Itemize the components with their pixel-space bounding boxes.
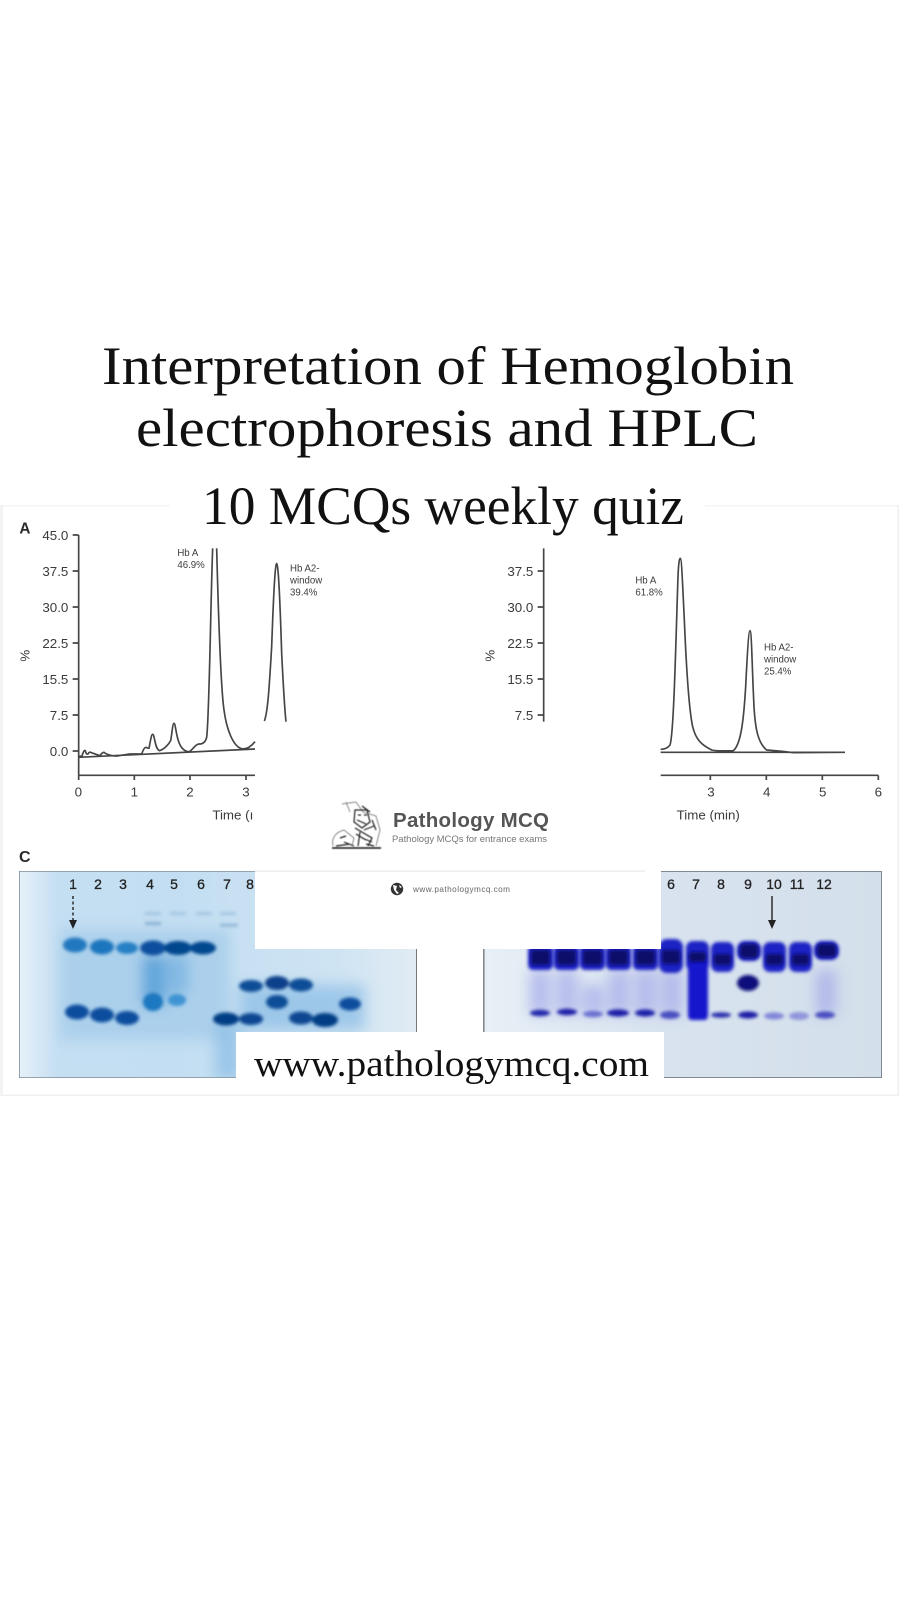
x axis: Time (min) [677, 807, 740, 822]
x axis: 1 [131, 785, 138, 800]
logo name: Pathology MCQ [393, 809, 549, 832]
label: Hb A2 window: window [763, 654, 796, 665]
gel border [19, 871, 255, 1078]
y axis [482, 548, 544, 723]
label: Hb A2 window: 39.4% [290, 587, 318, 598]
smears [530, 970, 836, 1015]
y axis: 7.5 [50, 708, 68, 723]
label: Hb A2 window: Hb A2- [764, 642, 794, 653]
band cores: darker centres [531, 944, 836, 965]
lane numbers: left gel: 5 [170, 876, 178, 892]
title: 10 MCQs weekly quiz [202, 476, 684, 536]
panel label C: C [19, 849, 31, 866]
lane numbers: left gel [69, 876, 254, 892]
x axis [661, 775, 882, 822]
lane numbers: left gel: 1 [69, 876, 77, 892]
icon: pathologist sketch [332, 802, 381, 848]
y axis: 15.5 [42, 672, 68, 687]
lane numbers: right gel: 8 [717, 876, 725, 892]
x axis: Time (ı [212, 807, 253, 822]
x axis: 6 [875, 785, 882, 800]
y axis: 30.0 [507, 600, 533, 615]
label: Hb A2 window: Hb A2- [290, 563, 320, 574]
x axis: 4 [763, 785, 771, 800]
faint upper bands [145, 912, 238, 926]
panel: figure frame [0, 505, 899, 1096]
y axis: 22.5 [507, 636, 533, 651]
x axis [75, 775, 255, 822]
lane numbers: left gel: 2 [94, 876, 102, 892]
y axis: % [17, 650, 32, 662]
x axis: 3 [707, 785, 715, 800]
icon: globe [391, 883, 403, 895]
arrow: dashed lane marker [69, 896, 77, 929]
lane numbers: left gel: 6 [197, 876, 205, 892]
website banner: www.pathologymcq.com [254, 1044, 649, 1085]
website small text: www.pathologymcq.com [412, 885, 510, 894]
lane numbers: left gel: 8 [246, 876, 254, 892]
logo: Pathology MCQ [332, 802, 549, 848]
y axis: 15.5 [507, 672, 533, 687]
y axis: 45.0 [42, 528, 68, 543]
x axis: 3 [242, 785, 250, 800]
panel: right electrophoresis gel [483, 871, 883, 1078]
y axis: 37.5 [507, 564, 533, 579]
arrow: lane 10 marker [768, 896, 776, 929]
lane numbers: left gel: 7 [223, 876, 231, 892]
label: Hb A: 46.9% [177, 560, 205, 571]
y axis: 0.0 [50, 744, 68, 759]
label: Hb A: Hb A [177, 548, 198, 559]
y axis: % [482, 650, 497, 662]
lane numbers: right gel: 7 [692, 876, 700, 892]
logo tagline: Pathology MCQs for entrance exams [392, 834, 547, 845]
lane numbers: right gel: 9 [744, 876, 752, 892]
label: Hb A: 61.8% [635, 588, 663, 599]
bands: lower row [530, 1009, 835, 1020]
x axis: 2 [186, 785, 194, 800]
title: electrophoresis and HPLC [136, 398, 758, 458]
label: Hb A: Hb A [635, 576, 656, 587]
y axis: 7.5 [515, 708, 533, 723]
panel: left electrophoresis gel [19, 871, 419, 1080]
lane numbers: right gel: 12 [816, 876, 832, 892]
chart: panel B chromatogram [482, 548, 882, 822]
label: Hb A2 window: 25.4% [764, 666, 792, 677]
lane numbers: right gel: 6 [667, 876, 675, 892]
bands: upper row [63, 938, 313, 992]
label: Hb A2 window: window [289, 575, 322, 586]
lane numbers: left gel: 3 [119, 876, 127, 892]
lane numbers: right gel: 11 [790, 876, 804, 892]
title [102, 336, 794, 536]
gel border [661, 871, 882, 1078]
divider line [255, 870, 645, 872]
x axis: 0 [75, 785, 82, 800]
y axis: 30.0 [42, 600, 68, 615]
trace [78, 548, 255, 757]
website row with globe [391, 883, 510, 895]
lane numbers: right gel [667, 876, 832, 892]
bands: upper row [528, 939, 839, 1020]
y axis: 37.5 [42, 564, 68, 579]
bands: lower row [65, 993, 361, 1027]
peak: Hb A2 window [264, 563, 286, 722]
lane numbers: right gel: 10 [766, 876, 782, 892]
x axis: 5 [819, 785, 826, 800]
y axis: 22.5 [42, 636, 68, 651]
lane numbers: left gel: 4 [146, 876, 154, 892]
y axis [17, 528, 79, 775]
title: Interpretation of Hemoglobin [102, 336, 794, 396]
trace [661, 558, 845, 753]
chart: panel A chromatogram [17, 521, 322, 822]
panel label A: A [19, 521, 30, 538]
